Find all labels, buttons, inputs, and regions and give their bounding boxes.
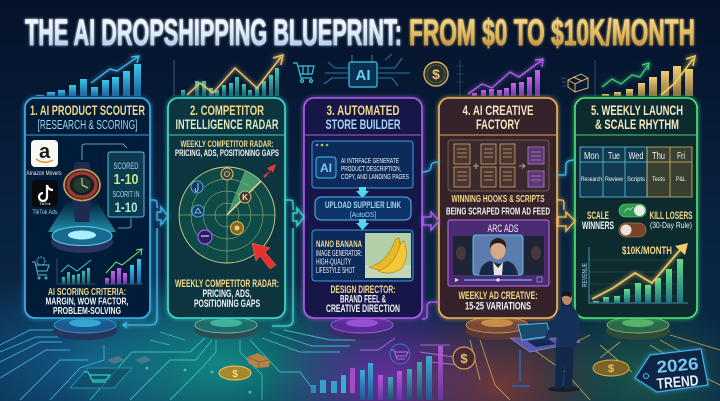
text: design director: BRAND FEEL & — [340, 294, 386, 306]
documents grid — [448, 140, 549, 191]
illustration: floor coin gold — [593, 360, 629, 376]
icon: shopping cart — [293, 63, 314, 82]
text: radar intro — [175, 139, 279, 158]
icon: dollar coin — [424, 62, 448, 86]
window: AI interface: AI INTRFACE GENERATE — [341, 156, 399, 165]
schedule table: Fri — [677, 151, 685, 162]
arrow: small red — [263, 164, 276, 178]
pedestal: panel 5 — [606, 317, 670, 340]
illustration: desk with tablet — [510, 323, 580, 386]
callout arrows — [82, 144, 131, 228]
icon: floor dollar purple: $ — [460, 351, 468, 366]
pedestal: panel 3 — [330, 317, 394, 340]
panel 4: AI creative factory — [439, 98, 557, 318]
text: design director — [326, 284, 400, 315]
arrow: down 2 — [356, 219, 369, 230]
box: upload supplier link: UPLOAD SUPPLIER LINK — [325, 200, 401, 211]
window: AI interface — [312, 141, 413, 188]
icon: AI chip with circuits: AI — [356, 67, 370, 84]
score card: 1-10 — [114, 199, 138, 215]
pedestal: panel 4 — [465, 317, 529, 340]
toggle labels: kill losers: (30-Day Rule) — [650, 220, 692, 230]
box: upload supplier link — [315, 197, 411, 220]
title: THE AI DROPSHIPPING BLUEPRINT: — [25, 12, 402, 53]
text: scoring criteria: MARGIN, WOW FACTOR, — [46, 296, 129, 308]
heading: panel 1: [RESEARCH & SCORING] — [38, 117, 138, 132]
chart: teal and gold above panel 2 — [174, 55, 283, 96]
illustration: floor coin — [219, 366, 251, 380]
box: nano banana: HIGH-QUALITY — [316, 258, 351, 266]
schedule table: Review — [605, 176, 623, 183]
heading: panel 4: FACTORY — [476, 116, 520, 132]
box: nano banana — [312, 230, 413, 281]
heading: panel 3: 3. AUTOMATED — [326, 102, 400, 118]
radar blip: store — [192, 205, 204, 217]
revenue chart: REVENUE — [582, 263, 589, 287]
illustration: cardboard box — [247, 353, 270, 368]
badge: 2026 trend tag: TREND — [656, 372, 699, 393]
icon: Amazon: Amazon Movers — [26, 171, 62, 177]
illustration: floor icons — [107, 356, 151, 364]
icon: AI chip with circuits — [324, 54, 410, 87]
schedule table: Research — [581, 176, 602, 183]
radar blip: K: K — [242, 193, 248, 202]
text: radar summary: POSITIONING GAPS — [194, 298, 260, 310]
text: radar summary — [175, 278, 279, 310]
revenue chart: $10K/MONTH — [622, 245, 672, 257]
text: design director: CREATIVE DIRECTION — [326, 303, 400, 315]
connector arrows between panels — [123, 160, 575, 328]
icon: floor dollar purple — [453, 347, 475, 369]
schedule table: Mon — [584, 151, 599, 162]
icon: Amazon: a — [39, 141, 51, 163]
circuit traces — [0, 330, 720, 400]
schedule table: Thu — [652, 151, 665, 162]
hologram beam — [48, 200, 116, 232]
chart: purple and green mini — [105, 249, 143, 284]
pedestal: panel 1 — [53, 317, 117, 340]
video thumbnail: presenter — [473, 235, 523, 275]
pedestal: panel 2 — [194, 317, 258, 339]
illustration: businessman — [544, 291, 580, 392]
text: scoring criteria: PROBLEM-SOLVING — [53, 305, 121, 317]
icon: TikTok — [32, 180, 58, 216]
text: radar intro: WEEKLY COMPETITOR RADAR: — [180, 139, 274, 149]
window: AI interface: PRODUCT DESCRIPTION, — [341, 164, 401, 173]
illustration: floor cart — [70, 368, 132, 388]
heading: panel 2: 2. COMPETITOR — [190, 102, 264, 118]
icon: Amazon — [26, 140, 62, 177]
Arc Ads player: ARC ADS — [488, 223, 518, 235]
schedule table: Tests — [652, 176, 666, 183]
arrow: big red — [252, 243, 276, 269]
box: upload supplier link: [AutoDS] — [350, 210, 376, 219]
badge: 2026 trend tag: 2026 — [656, 354, 699, 377]
chart: blue growth above panel 1 — [36, 56, 141, 96]
toggle: off — [619, 223, 646, 237]
icon: TikTok: TikTok — [39, 201, 51, 206]
badge: 2026 trend tag — [635, 349, 708, 393]
text: winning hooks: WINNING HOOKS & SCRIPTS — [452, 194, 545, 205]
chart: teal mini — [57, 258, 95, 284]
toggle labels: scale winners: WINNERS — [582, 220, 614, 232]
score card: 1-10 — [114, 171, 138, 188]
toggle labels: scale winners: SCALE — [587, 210, 609, 222]
text: winning hooks — [446, 194, 550, 218]
text: ad creative — [458, 290, 538, 312]
heading: panel 1 — [30, 102, 145, 132]
schedule table: Wed — [628, 151, 644, 162]
schedule table: P&L — [676, 176, 686, 183]
heading: panel 3: STORE BUILDER — [326, 116, 400, 132]
score card: SCORED — [114, 161, 139, 171]
panel 2: competitor intelligence radar — [168, 98, 285, 318]
heading: panel 3 — [326, 102, 400, 132]
heading: panel 4: 4. AI CREATIVE — [462, 102, 534, 118]
toggle labels: scale winners — [582, 210, 614, 232]
box: nano banana: IMAGE GENERATOR: — [316, 249, 362, 258]
schedule table: Scripts — [627, 176, 646, 183]
heading: panel 4 — [462, 102, 534, 132]
illustration: floor bars — [311, 346, 443, 400]
window: AI interface: COPY, AND LANDING PAGES — [341, 172, 409, 181]
heading: panel 5 — [591, 102, 683, 132]
chart: gold growth above panel 5 — [595, 56, 695, 96]
radar blip: target — [221, 168, 233, 180]
icon: TikTok: TikTok Ads — [32, 209, 58, 216]
schedule table: Tue — [608, 151, 620, 162]
icon: small cart — [32, 257, 49, 279]
radar chart — [179, 167, 275, 263]
radar blip: tiktok — [191, 181, 203, 193]
score card: SCORIT IN — [112, 190, 140, 199]
arrow: down 1 — [356, 187, 369, 198]
score card — [108, 152, 144, 217]
schedule table — [580, 147, 692, 197]
icon: floor cart badge — [390, 344, 410, 364]
box: nano banana: LIFESTYLE SHOT — [316, 266, 355, 275]
text: ad creative: WEEKLY AD CREATIVE: — [458, 290, 538, 302]
text: radar intro: PRICING, ADS, POSITIONING GAPS — [175, 148, 279, 158]
illustration: floor coin gold: $ — [608, 363, 614, 375]
text: scoring criteria: AI SCORING CRITERIA: — [48, 286, 126, 298]
text: design director: DESIGN DIRECTOR: — [330, 284, 396, 296]
box: nano banana: NANO BANANA — [316, 239, 362, 250]
icon: package box — [561, 74, 588, 92]
toggle labels: kill losers — [650, 210, 692, 230]
heading: panel 5: & SCALE RHYTHM — [595, 116, 679, 132]
radar blip: gold — [230, 222, 244, 234]
text: radar summary: WEEKLY COMPETITOR RADAR: — [175, 278, 279, 290]
toggle labels: kill losers: KILL LOSERS — [650, 210, 692, 222]
text: scoring criteria — [46, 286, 129, 317]
radar blip: purple — [198, 230, 212, 244]
text: ad creative: 15-25 VARIATIONS — [465, 300, 531, 312]
toggle: on — [619, 204, 646, 217]
heading: panel 1: 1. AI PRODUCT SCOUTER — [30, 102, 145, 118]
panel 3: automated store builder — [304, 98, 422, 318]
text: radar summary: PRICING, ADS, — [202, 288, 252, 300]
panel 5: weekly launch and scale rhythm — [575, 98, 697, 318]
icon: watch — [64, 162, 100, 222]
platform — [51, 226, 113, 253]
heading: panel 2 — [176, 102, 278, 132]
heading: panel 2: INTELLIGENCE RADAR — [176, 116, 278, 132]
text: winning hooks: BEING SCRAPED FROM AD FEED — [446, 206, 550, 218]
chart: purple growth above panel 4 — [456, 59, 543, 96]
Arc Ads player — [448, 220, 549, 286]
revenue chart — [582, 243, 688, 303]
image: bananas — [365, 233, 411, 278]
icon: dollar coin: $ — [432, 66, 440, 82]
window: AI interface: AI — [320, 161, 332, 175]
panel 1: AI product scouter — [25, 98, 150, 318]
illustration: floor coin: $ — [232, 369, 238, 380]
